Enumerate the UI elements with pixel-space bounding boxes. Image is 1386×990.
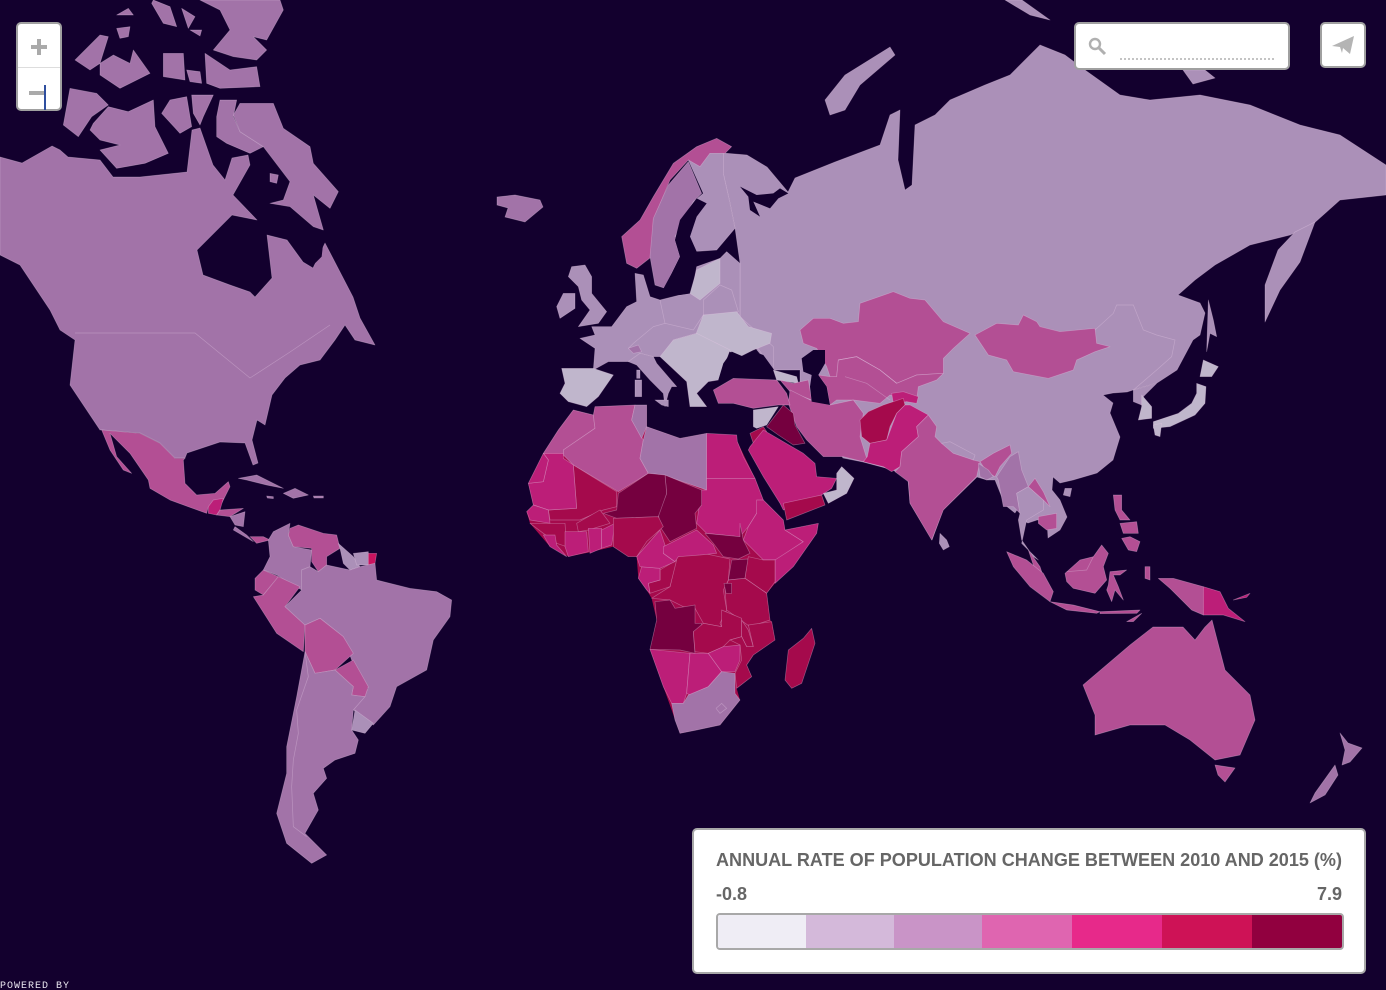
Belarus (703, 285, 738, 315)
Borneo (1065, 545, 1108, 593)
Senegal (527, 505, 550, 523)
Kamchatka (1265, 222, 1315, 322)
region: North America (0, 0, 375, 465)
Cuba (238, 475, 283, 488)
Uganda (728, 559, 748, 580)
legend title and range labels (716, 850, 1342, 904)
search input dotted line (1120, 58, 1274, 60)
Kenya (745, 557, 775, 593)
New Guinea (Indonesia) (1158, 578, 1203, 615)
Iraq (767, 405, 805, 445)
South Sudan (705, 523, 750, 559)
DR Congo (652, 553, 730, 627)
Thailand (1017, 487, 1043, 560)
Western and central Europe (580, 252, 773, 370)
White Sea (740, 187, 788, 217)
Syria (753, 407, 778, 428)
Colombia (263, 523, 312, 590)
Malawi (742, 620, 753, 647)
Sweden (650, 162, 702, 288)
icon: magnifier (1088, 38, 1106, 55)
Sulawesi (1107, 570, 1127, 602)
Arctic islands (63, 0, 338, 267)
Pakistan (863, 405, 928, 472)
Hispaniola (283, 488, 308, 498)
Botswana (687, 653, 722, 695)
Bolivia (305, 618, 353, 673)
icon: paper plane (1332, 36, 1354, 54)
Sri Lanka (939, 533, 949, 550)
Myanmar (997, 452, 1028, 513)
text caret (44, 85, 46, 110)
Japan (1153, 360, 1218, 437)
Canada-US border (75, 325, 330, 378)
Cambodia (1038, 513, 1057, 530)
minus button (29, 91, 45, 95)
Caspian Sea (802, 350, 830, 405)
Papua New Guinea (1203, 587, 1245, 622)
region: Africa and Middle East (527, 378, 854, 733)
Java and Lesser Sunda (1050, 602, 1142, 622)
plus button (31, 39, 47, 55)
North Korea (1133, 383, 1157, 405)
Mexico (102, 430, 230, 513)
Brazil (285, 563, 452, 725)
Libya (640, 427, 707, 490)
Switzerland (628, 345, 642, 353)
Iberia (560, 368, 613, 407)
Chad (658, 475, 702, 542)
Saudi Arabia (748, 430, 837, 510)
Madagascar (785, 628, 815, 688)
legend title and range labels: ANNUAL RATE OF POPULATION CHANGE BETWEEN 2010 AND 2015 (%) (716, 850, 1342, 870)
Gabon (638, 567, 660, 593)
Mediterranean islands (635, 370, 668, 407)
Zambia (693, 610, 742, 653)
Jordan and Levant (750, 427, 767, 443)
Mali (548, 465, 617, 520)
Niger (603, 473, 667, 518)
Norway (622, 138, 732, 268)
South Africa (672, 672, 740, 733)
region: Iceland (497, 195, 543, 222)
Western Sahara (528, 453, 548, 483)
Finland (675, 153, 735, 252)
Rwanda and Burundi (724, 583, 732, 593)
Guinea (530, 523, 567, 547)
Ivory Coast (565, 532, 588, 557)
Chile border (292, 652, 308, 837)
Sudan (697, 478, 763, 537)
colour scale bar (716, 913, 1344, 950)
legend panel (692, 828, 1366, 974)
New Zealand (1310, 733, 1362, 803)
Sakhalin (1207, 300, 1217, 352)
Nepal (942, 442, 975, 460)
Yemen (783, 495, 825, 520)
Namibia (650, 649, 690, 703)
Afghanistan (860, 398, 905, 443)
region: Latin America (102, 430, 452, 863)
Tunisia (632, 405, 647, 438)
Paraguay (335, 660, 368, 697)
Nigeria (613, 517, 663, 557)
Central Asia (818, 357, 943, 405)
Arctic islands of Russia (1183, 70, 1215, 84)
Canada and United States (0, 128, 375, 465)
Central Europe borders (628, 300, 665, 348)
Morocco (543, 410, 595, 453)
Lesotho (716, 703, 727, 713)
Uruguay (352, 710, 373, 733)
legend title and range labels: 7.9 (1317, 884, 1342, 904)
Turkey (713, 378, 790, 408)
Ecuador (255, 570, 278, 595)
Egypt (707, 433, 755, 478)
Tanzania (725, 578, 770, 627)
Iran (788, 390, 867, 462)
region: Oceania (1083, 620, 1362, 803)
United Kingdom (568, 265, 607, 327)
region: Eurasia base (Russia and China) (723, 0, 1386, 540)
divider (18, 67, 60, 68)
Ireland (557, 293, 575, 318)
Caucasus (780, 380, 812, 400)
locate button (1320, 22, 1366, 68)
Baltic states (690, 258, 720, 300)
Malay peninsula (1028, 550, 1043, 577)
Ethiopia and Eritrea (743, 500, 803, 560)
Australia (1083, 620, 1255, 760)
Georgia (773, 370, 798, 383)
search box (1074, 22, 1290, 70)
Laos (1028, 478, 1050, 507)
Argentina and Chile (277, 652, 365, 863)
Central America (208, 498, 270, 543)
South Korea (1138, 395, 1152, 420)
Sumatra (1007, 552, 1053, 602)
Moluccas (1145, 567, 1150, 580)
Oman (823, 467, 854, 503)
Tajikistan and Kyrgyz highlight (892, 392, 918, 403)
Baltic Sea (660, 198, 727, 295)
Africa silhouette underlay (527, 405, 818, 733)
Philippines (1113, 495, 1140, 552)
Mongolia (975, 315, 1110, 378)
Central African Republic (663, 530, 717, 562)
Burkina Faso (577, 510, 610, 532)
Bangladesh (978, 463, 993, 480)
Guianas (338, 543, 377, 570)
Togo and Benin (602, 523, 615, 548)
Mauritania (528, 453, 577, 510)
zoom control (16, 22, 62, 111)
Peru (253, 577, 305, 652)
India (895, 415, 1012, 540)
Tasmania (1215, 765, 1235, 782)
Somalia (775, 523, 818, 583)
Italy (628, 353, 677, 407)
Angola (650, 600, 702, 653)
Mozambique (730, 622, 775, 688)
Congo (648, 560, 677, 593)
Novaya Zemlya (825, 47, 895, 115)
legend title and range labels: -0.8 (716, 884, 747, 904)
Venezuela (288, 525, 340, 572)
region: Europe (557, 138, 798, 407)
Cameroon (637, 530, 675, 568)
Ghana (588, 528, 602, 553)
Ukraine (695, 312, 772, 357)
Northeast China border (1095, 305, 1175, 390)
Balkans (660, 333, 730, 407)
region: Asia (780, 292, 1250, 622)
Sierra Leone and Liberia (543, 535, 567, 557)
Black Sea (718, 352, 777, 383)
Zimbabwe (708, 645, 740, 672)
Algeria (563, 405, 648, 492)
Hainan (1063, 488, 1072, 497)
Kazakhstan (800, 292, 970, 383)
